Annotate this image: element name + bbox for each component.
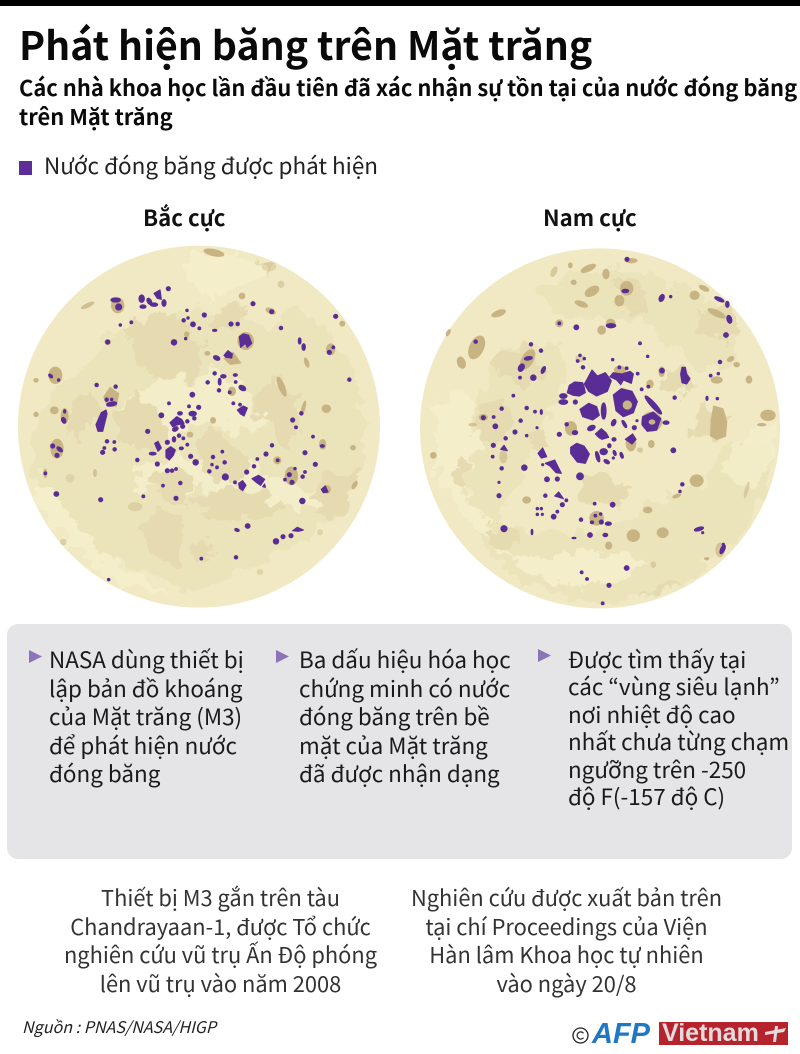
logo: AFP Vietnam — [572, 1018, 788, 1050]
fact text 3: Được tìm thấy tại — [568, 643, 746, 675]
note: publication: vào ngày 20/8 — [496, 968, 637, 998]
fact text 1: đóng băng — [49, 757, 160, 789]
fact text 1: NASA dùng thiết bị — [49, 643, 244, 675]
fact text 3: nơi nhiệt độ cao — [568, 698, 736, 730]
fact text 2: chứng minh có nước — [299, 672, 510, 704]
fact text 2: đã được nhận dạng — [299, 757, 500, 789]
note: publication: tại chí Proceedings của Viện — [425, 910, 708, 942]
fact text 3: độ F(-157 độ C) — [568, 780, 725, 812]
heading: south pole: Nam cực — [543, 201, 637, 233]
subtitle: trên Mặt trăng — [19, 101, 173, 132]
panel: key facts — [7, 624, 792, 859]
fact text 1 — [49, 643, 244, 789]
Vietnam badge — [659, 1022, 788, 1045]
note: M3 instrument — [64, 882, 377, 998]
bullet arrow 3 — [538, 649, 551, 662]
note: M3 instrument: lên vũ trụ vào năm 2008 — [100, 968, 341, 998]
fact text 3: nhất chưa từng chạm — [568, 725, 789, 757]
heading: north pole: Bắc cực — [143, 201, 225, 233]
fact text 1: để phát hiện nước — [49, 728, 237, 760]
fact text 2: mặt của Mặt trăng — [299, 728, 488, 760]
legend: Nước đóng băng được phát hiện — [44, 149, 378, 181]
subtitle — [19, 72, 797, 132]
source: Nguồn : PNAS/NASA/HIGP — [22, 1014, 216, 1038]
map: south pole — [420, 248, 780, 608]
fact text 2 — [299, 643, 511, 789]
fact text 2: đóng băng trên bề — [299, 700, 490, 732]
fact text 1: của Mặt trăng (M3) — [49, 700, 242, 732]
AFP wordmark: AFP — [592, 1018, 650, 1050]
fact text 3 — [568, 643, 789, 812]
note: M3 instrument: nghiên cứu vũ trụ Ấn Độ phóng — [64, 939, 377, 970]
note: publication — [411, 882, 722, 998]
fact text 3: các “vùng siêu lạnh” — [568, 670, 780, 702]
Vietnam badge: Vietnam — [662, 1019, 759, 1047]
fact text 2: Ba dấu hiệu hóa học — [299, 643, 511, 675]
bullet arrow 1 — [29, 650, 42, 663]
bullet arrow 2 — [276, 650, 289, 663]
copyright symbol — [572, 1027, 589, 1044]
subtitle: Các nhà khoa học lần đầu tiên đã xác nhận sự tồn tại của nước đóng băng — [19, 72, 797, 103]
fact text 3: ngưỡng trên -250 — [568, 753, 746, 785]
note: M3 instrument: Chandrayaan-1, được Tổ chức — [70, 910, 371, 942]
note: publication: Hàn lâm Khoa học tự nhiên — [429, 939, 704, 970]
map: north pole — [18, 246, 380, 608]
title: Phát hiện băng trên Mặt trăng — [19, 16, 592, 72]
note: publication: Nghiên cứu được xuất bản trên — [411, 882, 722, 913]
moon maps — [18, 246, 780, 608]
note: M3 instrument: Thiết bị M3 gắn trên tàu — [101, 882, 340, 913]
fact text 1: lập bản đồ khoáng — [49, 672, 243, 704]
